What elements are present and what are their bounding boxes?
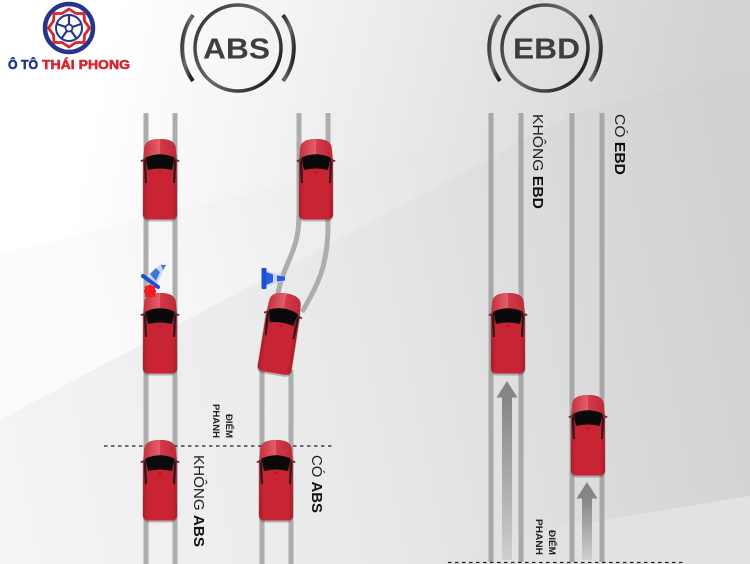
logo wordmark bbox=[8, 57, 130, 72]
icon: ABS badge bbox=[182, 5, 294, 91]
label: Điểm phanh ABS: ĐIỂM bbox=[223, 414, 235, 438]
label: Không EBD: KHÔNG EBD bbox=[529, 114, 546, 209]
cars: no ABS bbox=[140, 139, 180, 522]
label: Điểm phanh ABS bbox=[210, 404, 235, 438]
label: Điểm phanh EBD bbox=[533, 519, 558, 555]
icon: upright cone bbox=[262, 268, 285, 289]
label: Có ABS: CÓ ABS bbox=[308, 455, 325, 513]
logo wordmark: Ô TÔ bbox=[8, 57, 38, 72]
arrow: EBD left bbox=[496, 381, 518, 560]
icon: ABS badge: ABS bbox=[203, 34, 270, 66]
impact burst bbox=[144, 284, 156, 298]
road: ABS without ABS lane bbox=[144, 113, 178, 564]
cars: EBD bbox=[488, 293, 608, 478]
road: ABS with ABS lane curving bbox=[262, 113, 328, 564]
braking point line ABS bbox=[104, 445, 332, 447]
label: Điểm phanh ABS: PHANH bbox=[210, 404, 221, 438]
icon: EBD badge: EBD bbox=[513, 34, 580, 66]
icon: knocked cone and impact bbox=[143, 264, 166, 298]
logo emblem bbox=[45, 4, 93, 52]
label: Điểm phanh EBD: PHANH bbox=[533, 519, 544, 555]
icon: EBD badge bbox=[489, 5, 601, 91]
cars: with ABS bbox=[254, 139, 336, 522]
logo: Ô TÔ Thái Phong bbox=[8, 4, 130, 72]
label: Có EBD: CÓ EBD bbox=[611, 114, 628, 175]
braking point line EBD bbox=[448, 562, 686, 564]
road: EBD lanes bbox=[488, 113, 604, 562]
label: Không ABS: KHÔNG ABS bbox=[190, 455, 207, 547]
logo wordmark: THÁI PHONG bbox=[42, 57, 130, 72]
label: Điểm phanh EBD: ĐIỂM bbox=[546, 530, 558, 555]
arrow: EBD right bbox=[576, 482, 598, 560]
